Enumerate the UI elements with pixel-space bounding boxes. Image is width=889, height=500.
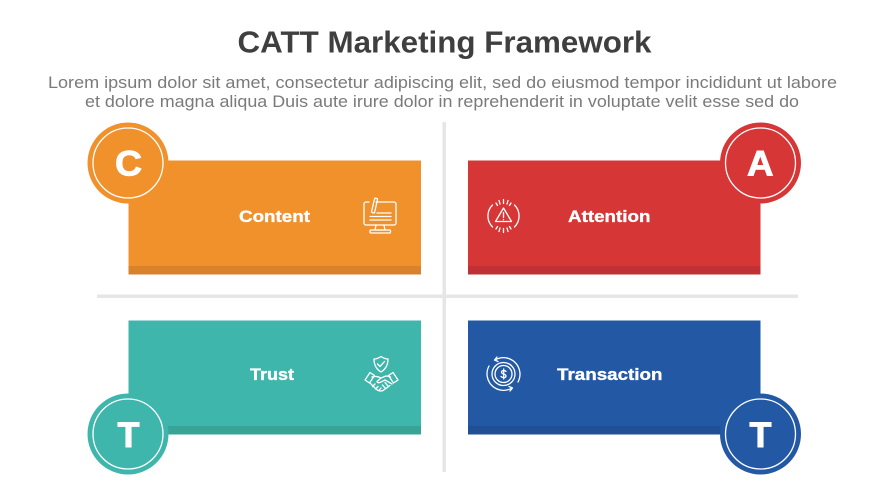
badge: A bbox=[720, 122, 801, 204]
icon: monitor with pen bbox=[364, 198, 396, 233]
icon: warning bbox=[488, 200, 519, 232]
badge: T: T bbox=[118, 416, 140, 455]
badge: C: C bbox=[115, 144, 142, 184]
label: content: Content bbox=[239, 207, 310, 226]
subtitle text block: Lorem ipsum dolor sit amet, consectetur adipiscing elit, sed do eiusmod tempor incididunt ut labore bbox=[48, 74, 837, 92]
icon: shield and handshake bbox=[365, 356, 398, 391]
badge: T: T bbox=[750, 416, 772, 455]
panel: attention bbox=[468, 122, 801, 274]
card shade: transaction bbox=[468, 426, 760, 434]
card: content bbox=[128, 160, 421, 274]
badge: A: A bbox=[747, 144, 774, 184]
card shade: trust bbox=[128, 426, 421, 434]
card: trust bbox=[128, 320, 421, 434]
label: transaction: Transaction bbox=[557, 365, 662, 384]
card shade: attention bbox=[468, 266, 760, 274]
card: attention bbox=[468, 160, 760, 274]
badge: T bbox=[720, 394, 801, 474]
card: transaction bbox=[468, 320, 760, 434]
card shade: content bbox=[128, 266, 421, 274]
title: CATT Marketing Framework bbox=[238, 24, 652, 60]
panel: trust bbox=[88, 320, 421, 474]
badge: C bbox=[88, 122, 168, 204]
label: attention: Attention bbox=[568, 207, 650, 226]
subtitle text block bbox=[48, 74, 837, 111]
panel: content bbox=[88, 122, 421, 274]
subtitle text block: et dolore magna aliqua Duis aute irure dolor in reprehenderit in voluptate velit esse sed do bbox=[85, 93, 799, 111]
panel: transaction bbox=[468, 320, 801, 474]
icon: dollar cycle bbox=[487, 357, 520, 391]
badge: T bbox=[88, 394, 168, 474]
label: trust: Trust bbox=[250, 365, 294, 384]
